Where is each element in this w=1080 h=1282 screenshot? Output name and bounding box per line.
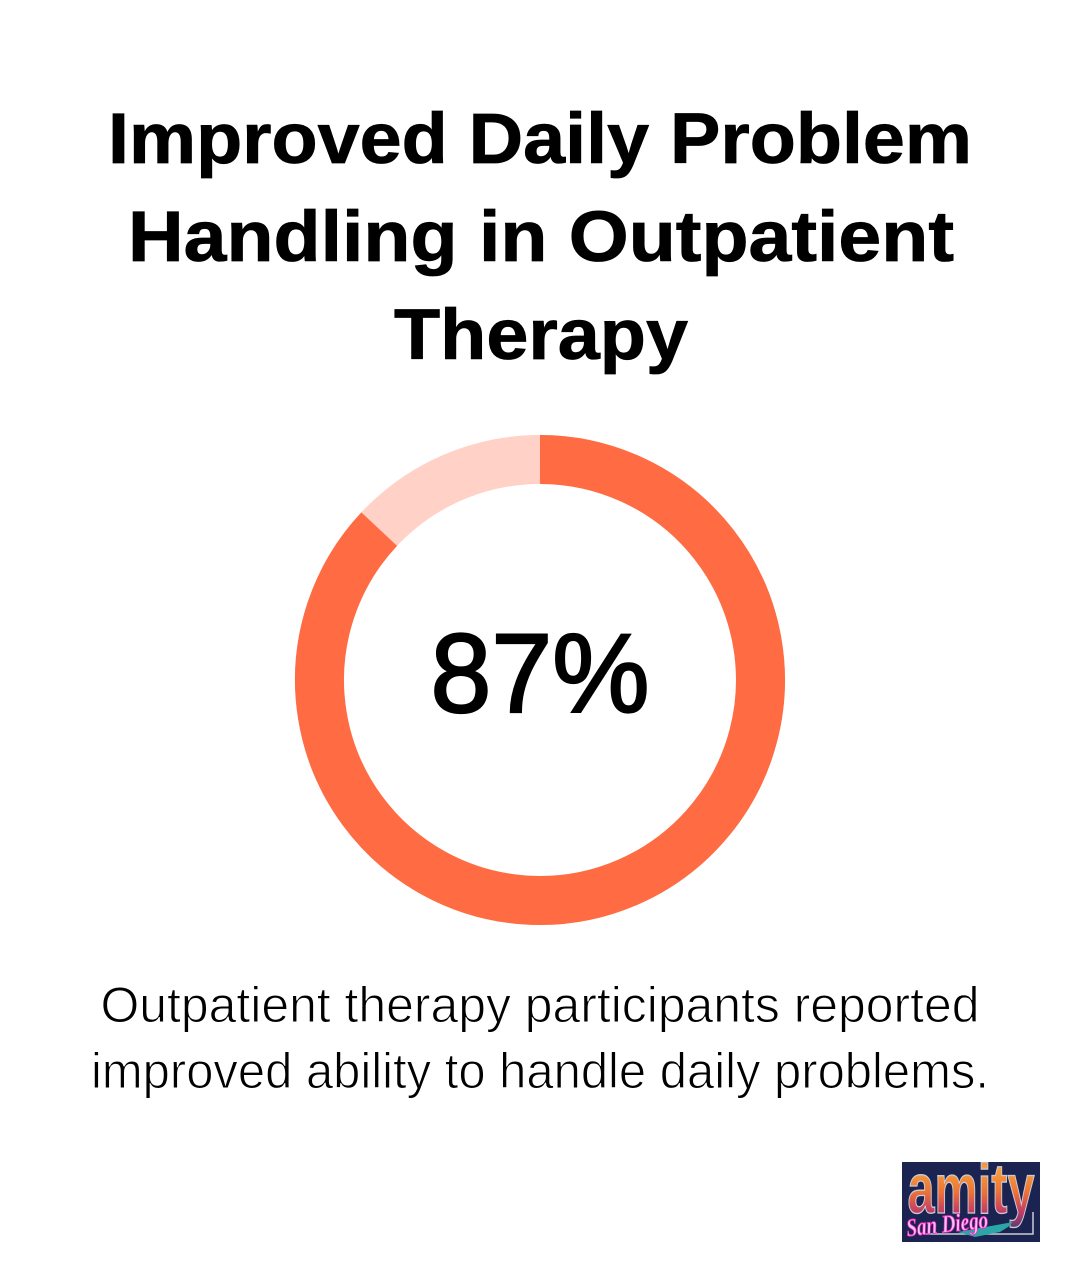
donut chart: 87% <box>319 460 760 900</box>
description text: Outpatient therapy participants reported <box>100 977 980 1033</box>
logo script: San Diego <box>905 1207 989 1242</box>
title <box>108 100 972 375</box>
title: Handling in Outpatient <box>128 198 954 277</box>
donut center value: 87% <box>430 611 650 736</box>
logo beach stripes <box>958 1222 1013 1237</box>
logo: amity San Diego <box>902 1162 1040 1242</box>
donut value segment <box>319 460 760 900</box>
title: Therapy <box>394 296 689 375</box>
description text <box>91 977 989 1099</box>
logo wordmark: amity <box>907 1148 1035 1228</box>
logo background <box>902 1162 1040 1242</box>
logo frame line <box>924 1212 1033 1234</box>
donut remainder segment <box>320 460 760 900</box>
title: Improved Daily Problem <box>108 100 972 179</box>
description text: improved ability to handle daily problems. <box>91 1043 989 1099</box>
